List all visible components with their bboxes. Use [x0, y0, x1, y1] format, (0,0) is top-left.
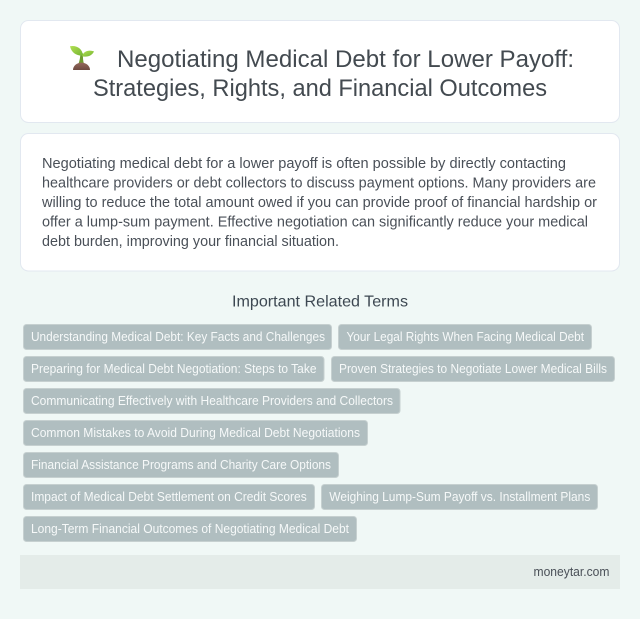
tag: long-term outcomes: Long-Term Financial Outcomes of Negotiating Medical Debt [31, 522, 349, 536]
tag: common mistakes [24, 420, 368, 446]
footer bar [20, 555, 620, 589]
summary paragraph: Negotiating medical debt for a lower payoff is often possible by directly contacting [42, 156, 566, 172]
tag: understanding medical debt [24, 324, 332, 350]
tag: proven strategies: Proven Strategies to Negotiate Lower Medical Bills [339, 362, 607, 376]
tag: financial assistance [24, 452, 338, 478]
tag: legal rights: Your Legal Rights When Facing Medical Debt [346, 330, 584, 344]
summary paragraph [41, 156, 597, 250]
tag: credit score impact [24, 484, 314, 510]
heading line 1: Negotiating Medical Debt for Lower Payoff: [117, 46, 574, 73]
tag: lump-sum vs installment [322, 484, 598, 510]
tag: long-term outcomes [24, 516, 356, 542]
heading line 2: Strategies, Rights, and Financial Outcomes [93, 75, 547, 102]
icon: sprout [70, 46, 94, 70]
section heading: related terms: Important Related Terms [232, 294, 408, 310]
panel: summary card [20, 134, 620, 271]
summary paragraph: debt burden, improving your financial situation. [42, 234, 339, 250]
tag: legal rights [338, 324, 592, 350]
tag: communicating effectively: Communicating Effectively with Healthcare Providers and Collectors [31, 394, 393, 408]
tag: credit score impact: Impact of Medical Debt Settlement on Credit Scores [31, 490, 307, 504]
tag group: related terms [24, 324, 614, 542]
tag: understanding medical debt: Understanding Medical Debt: Key Facts and Challenges [31, 330, 325, 344]
tag: preparing for negotiation [24, 356, 324, 382]
summary paragraph: willing to reduce the total amount owed if you can provide proof of financial hardship or [41, 195, 597, 211]
tag: preparing for negotiation: Preparing for Medical Debt Negotiation: Steps to Take [31, 362, 316, 376]
tag: financial assistance: Financial Assistance Programs and Charity Care Options [31, 458, 331, 472]
tag: common mistakes: Common Mistakes to Avoid During Medical Debt Negotiations [31, 426, 360, 440]
tag: communicating effectively [24, 388, 400, 414]
tag: proven strategies [332, 356, 614, 382]
summary paragraph: offer a lump-sum payment. Effective negotiation can significantly reduce your medical [42, 214, 588, 230]
panel: title card [20, 20, 620, 122]
tag: lump-sum vs installment: Weighing Lump-Sum Payoff vs. Installment Plans [329, 490, 590, 504]
footer source text: moneytar.com [534, 565, 610, 579]
summary paragraph: healthcare providers or debt collectors to discuss payment options. Many providers are [42, 176, 596, 192]
